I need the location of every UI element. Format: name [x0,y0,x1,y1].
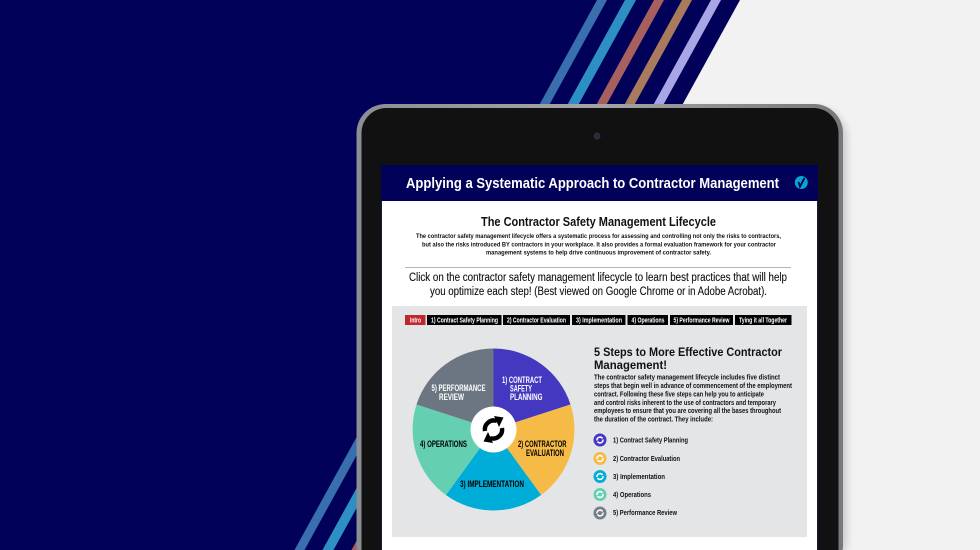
step 4: 4) Operations [613,492,651,499]
instruction text [409,272,787,298]
navigation tabs [405,315,792,325]
icon: check badge [795,176,808,189]
pie labels: EVALUATION [526,448,564,458]
navigation tabs: 3) Implementation [576,318,622,324]
step 2: 2) Contractor Evaluation [613,456,680,463]
navigation tabs: Intro [410,318,421,324]
intro paragraph: The contractor safety management lifecycle offers a systematic process for assessing and controlling not only the risks to contractors, [416,233,781,240]
navigation tabs: Tying it all Together [739,318,787,324]
navigation tabs: 2) Contractor Evaluation [507,318,566,324]
navigation tabs: 4) Operations [632,318,665,324]
intro paragraph [416,233,781,256]
segment: operations [413,404,494,495]
pie labels: 3) IMPLEMENTATION [460,479,524,489]
steps paragraph: contract. Following these five steps can help you to anticipate [594,392,764,398]
pie labels: 5) PERFORMANCE [432,383,486,393]
heading: five steps: Management! [594,358,667,372]
header banner [381,165,818,201]
heading: five steps [594,345,782,372]
pie labels: SAFETY [510,384,532,394]
segment: implementation [446,430,541,510]
pie labels: PLANNING [510,392,543,402]
pie labels: 1) CONTRACT [502,375,542,385]
step 1: 1) Contract Safety Planning [613,438,688,444]
segment: performance review [416,348,494,430]
icon: camera [594,132,600,140]
icon: refresh arrows [484,416,504,443]
navigation tabs: 1) Contract Safety Planning [431,318,498,324]
step 3: 3) Implementation [613,474,665,481]
segment: contractor evaluation [494,404,574,495]
pie hub [470,406,516,452]
steps paragraph: The contractor safety management lifecycle includes five distinct [594,374,781,382]
heading: five steps: 5 Steps to More Effective Contractor [594,345,782,359]
banner title: Applying a Systematic Approach to Contractor Management [406,176,779,192]
instruction text: you optimize each step! (Best viewed on Google Chrome or in Adobe Acrobat). [430,286,767,298]
intro paragraph: management systems to help drive continuous improvement of contractor safety. [486,250,711,256]
segment: contract safety planning [494,348,570,430]
steps paragraph [594,374,793,424]
instruction text: Click on the contractor safety management lifecycle to learn best practices that will help [409,272,787,284]
steps paragraph: and control risks inherent to the use of contractors and temporary [594,400,776,407]
diagonal coloured stripes [294,0,721,550]
steps paragraph: the duration of the contract. They include: [594,416,713,424]
tablet device [356,104,847,550]
heading: lifecycle: The Contractor Safety Management Lifecycle [481,215,716,229]
chart: lifecycle pie [413,348,574,510]
intro paragraph: but also the risks introduced BY contractors in your workplace. It also provides a formal evaluation framework for your contractor [422,242,776,248]
step 5: 5) Performance Review [613,510,677,517]
navigation tabs: 5) Performance Review [674,318,730,324]
list: five steps [594,434,688,520]
panel: lifecycle content [392,306,807,537]
steps paragraph: employees to ensure that you are covering all the bases throughout [594,408,782,415]
pie labels: 4) OPERATIONS [420,439,467,449]
tablet screen [381,165,818,550]
steps paragraph: steps that begin well in advance of commencement of the employment [594,383,793,390]
pie labels: 2) CONTRACTOR [518,439,567,449]
pie labels: REVIEW [439,392,465,402]
pie labels [420,375,567,489]
